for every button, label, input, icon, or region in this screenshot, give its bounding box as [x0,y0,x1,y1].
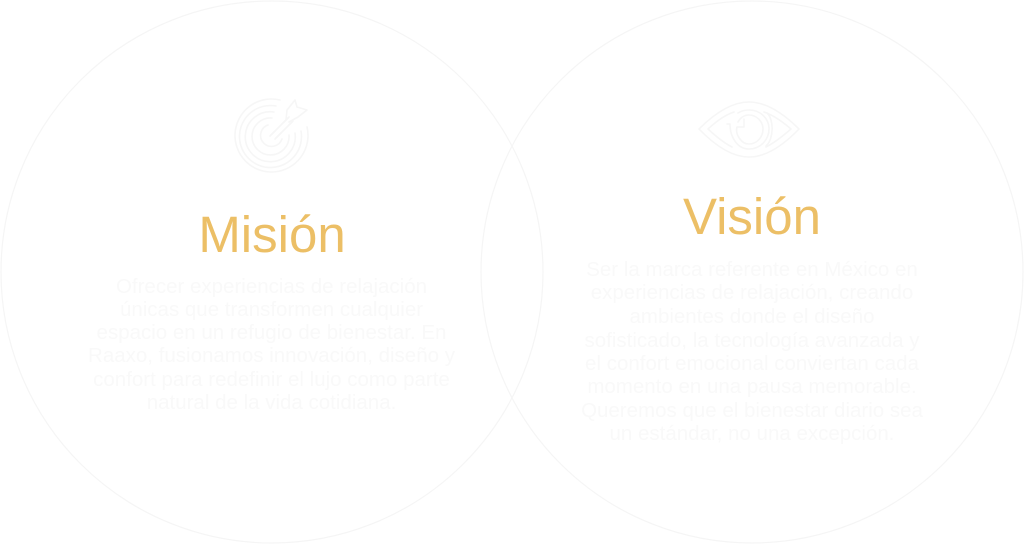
panel: mission [1,1,543,543]
vision text: Ser la marca referente en México en [586,258,918,281]
mission text: únicas que transformen cualquier [120,298,423,321]
icon: eye [699,102,799,157]
vision circle outline [481,1,1023,543]
mission text: Raaxo, fusionamos innovación, diseño y [88,344,456,367]
vision text: sofisticado, la tecnología avanzada y [584,329,920,352]
vision text: un estándar, no una excepción. [610,422,894,445]
vision text: experiencias de relajación, creando [591,281,913,304]
vision text: Queremos que el bienestar diario sea [581,399,924,422]
mission text [88,275,456,414]
vision text: ambientes donde el diseño [629,305,875,328]
mission text: espacio en un refugio de bienestar. En [97,321,446,344]
mission text: Ofrecer experiencias de relajación [116,275,427,298]
mission heading: Misión [198,206,346,263]
vision heading: Visión [683,188,821,245]
vision text: el confort emocional conviertan cada [585,352,920,375]
mission text: confort para redefinir el lujo como parte [93,368,450,391]
vision text: momento en una pausa memorable. [587,375,917,398]
mission text: natural de la vida cotidiana. [147,391,396,414]
vision text [581,258,924,445]
mission circle outline [1,1,543,543]
panel: vision [481,1,1023,543]
icon: target with arrow [235,99,308,172]
